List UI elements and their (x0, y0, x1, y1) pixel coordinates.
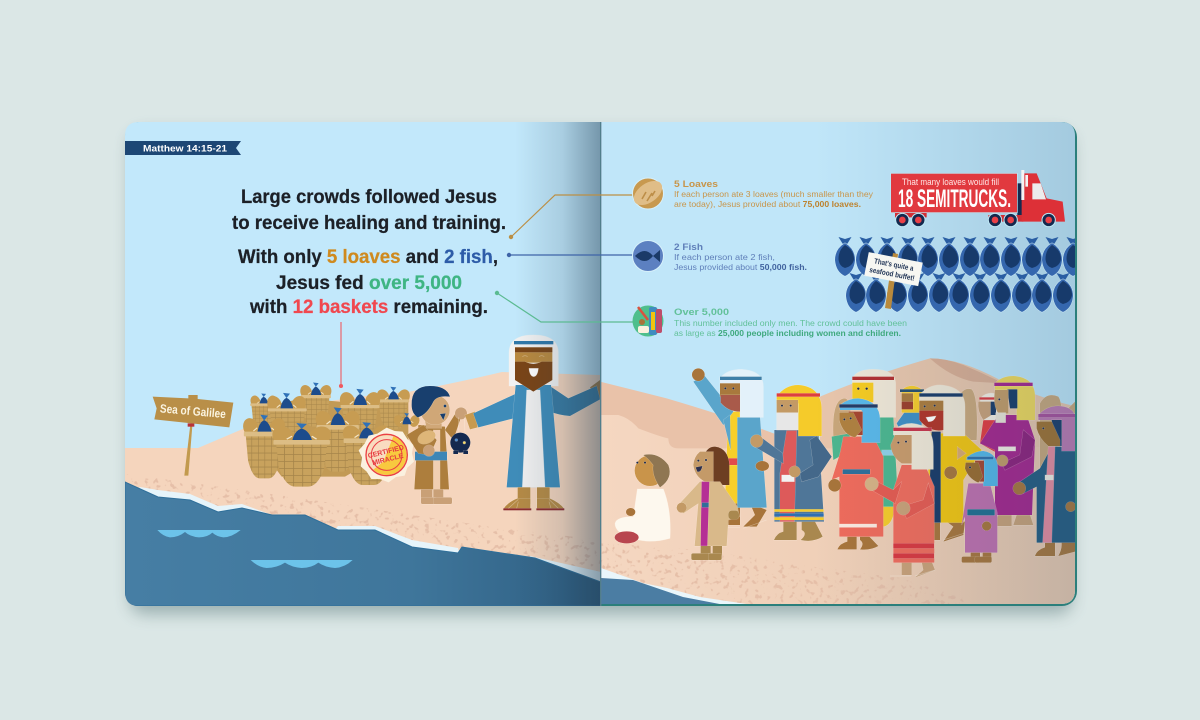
sign: seafood buffet: That's quite a (873, 256, 915, 273)
man in yellow robe (919, 385, 982, 542)
woman in navy robe (1013, 406, 1077, 556)
pouch of fish (450, 433, 470, 453)
robe (507, 385, 560, 487)
man raising arm (692, 368, 769, 528)
icon: fish (632, 240, 664, 272)
connector: loaves (509, 195, 634, 239)
baskets of leftovers (240, 383, 421, 487)
man in green robe (832, 369, 898, 527)
foreground sand (600, 415, 1077, 610)
back hill left (601, 382, 774, 448)
sign: Sea of Galilee (153, 395, 233, 476)
sign: seafood buffet (864, 252, 923, 309)
text: 5 loaves: 5 Loaves (674, 179, 718, 190)
connector: crowd (495, 291, 634, 322)
panel: right page (600, 122, 1077, 610)
text: over 5,000: Over 5,000 (674, 307, 729, 318)
beach speckle (602, 543, 963, 604)
title text block (232, 187, 506, 318)
text: 2 fish: 2 Fish (674, 242, 703, 253)
woman in coral robe (828, 398, 883, 550)
girl in pink robe (962, 451, 998, 563)
man in grey-blue robe (750, 385, 832, 541)
text: over 5,000: as large as 25,000 people including women and children. (674, 328, 901, 338)
truck label: 18 SEMITRUCKS. (898, 185, 1011, 213)
sea foam (601, 568, 746, 604)
background silhouettes (833, 389, 1077, 473)
fish grid: 50,000 fish (835, 237, 1083, 312)
sign: seafood buffet: seafood buffet! (869, 265, 915, 283)
stamp: certified miracle (359, 428, 414, 482)
ripples (157, 530, 353, 568)
ribbon: verse reference (125, 141, 241, 155)
text: 5 loaves (674, 179, 874, 209)
text: 5 loaves: If each person ate 3 loaves (much smaller than they (674, 189, 874, 199)
truck label (898, 177, 1011, 213)
book infographic (121, 122, 1081, 623)
man in red robe (865, 423, 935, 577)
title text block: Jesus fed over 5,000 (276, 273, 462, 294)
boy robe (414, 425, 449, 489)
shading on right page (601, 122, 1076, 606)
icon: loaf (629, 176, 667, 210)
headcloth (509, 335, 558, 386)
boy sitting (615, 454, 670, 543)
book cover edge (125, 122, 1077, 606)
child in tan robe (677, 447, 739, 560)
title text block: to receive healing and training. (232, 213, 506, 234)
right arm (590, 380, 600, 398)
truck label: That many loaves would fill (902, 177, 999, 187)
sea foam (139, 487, 600, 581)
small man in yellow cloth (897, 386, 924, 427)
sea (125, 482, 601, 606)
stamp: certified miracle: MIRACLE (372, 453, 405, 467)
loaves (407, 425, 437, 455)
spine line (600, 122, 602, 606)
text: 2 fish (674, 242, 807, 272)
semitruck (891, 170, 1065, 227)
Jesus (465, 335, 602, 510)
stamp: certified miracle: CERTIFIED (367, 444, 405, 460)
title text block: With only 5 loaves and 2 fish, (238, 247, 498, 268)
icon: crowd (632, 306, 664, 336)
book shadow (130, 132, 1072, 614)
sign: Sea of Galilee: Sea of Galilee (159, 401, 227, 421)
text: over 5,000: This number included only men. The crowd could have been (674, 318, 907, 328)
text: 5 loaves: are today), Jesus provided about 75,000 loaves. (674, 199, 861, 209)
beach speckle (128, 474, 600, 566)
connector: fish (507, 253, 634, 257)
crowd (615, 368, 1077, 577)
woman in magenta robe (980, 376, 1035, 526)
boy with loaves and fish (407, 386, 470, 504)
sand (125, 372, 602, 606)
title text block: with 12 baskets remaining. (249, 297, 488, 318)
ribbon: verse reference: Matthew 14:15-21 (143, 144, 228, 154)
spine shadow (527, 122, 600, 606)
connector: baskets (340, 322, 342, 388)
text: 2 fish: If each person ate 2 fish, (674, 252, 775, 262)
child in red with white cap (978, 392, 998, 452)
face (515, 347, 552, 363)
left arm (465, 412, 478, 429)
panel: left page (125, 122, 602, 606)
back hill right (820, 358, 1072, 448)
text: over 5,000 (674, 307, 907, 338)
sea (601, 578, 720, 604)
title text block: Large crowds followed Jesus (241, 187, 497, 208)
text: 2 fish: Jesus provided about 50,000 fish. (674, 262, 807, 272)
illustration group in zoom coordinates (153, 335, 602, 568)
